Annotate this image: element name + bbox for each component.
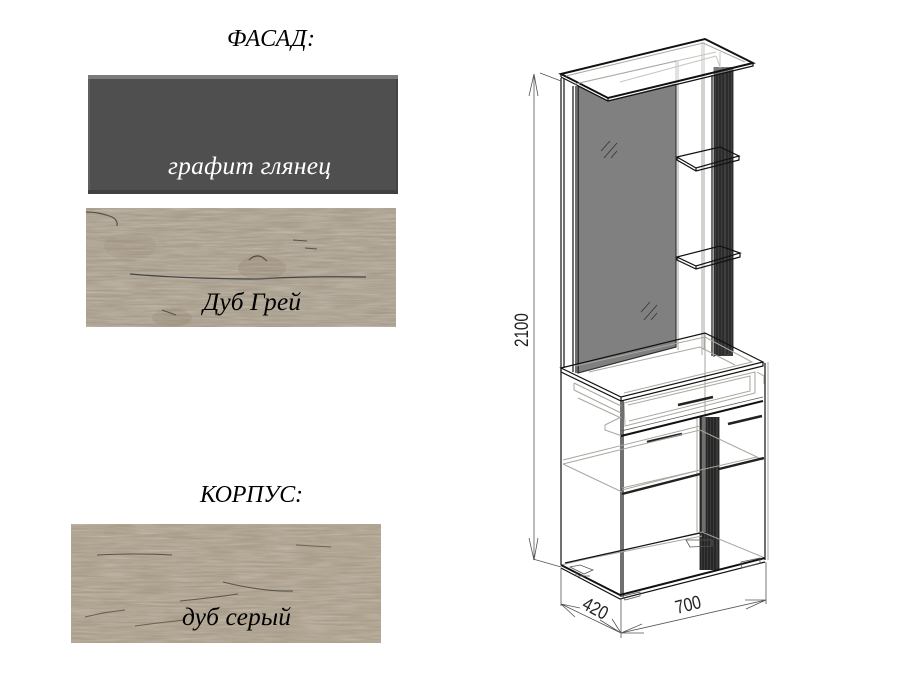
side posts and back lines [561, 75, 765, 597]
dark stripe upper [714, 67, 733, 356]
mirror [578, 84, 676, 373]
shelves [677, 147, 739, 171]
door divider line [621, 401, 763, 436]
heading: фасад: ФАСАД: [227, 26, 315, 52]
mirror glare marks [601, 141, 657, 320]
dark stripe lower [700, 417, 719, 570]
dimension: depth 420 [561, 568, 621, 633]
depth value: 420 [579, 593, 612, 624]
heading: корпус: КОРПУС: [199, 482, 303, 508]
drawer handle [678, 397, 713, 405]
height value: 2100 [510, 313, 532, 347]
panel: graphite gloss swatch [88, 75, 398, 194]
panel: oak grey swatch [86, 208, 396, 327]
top slab [561, 39, 753, 101]
dimension: width 700 [621, 562, 766, 638]
door handles [647, 416, 762, 442]
label: графит глянец: графит глянец [168, 151, 331, 180]
width value: 700 [673, 591, 703, 618]
label: дуб грей: Дуб Грей [201, 287, 301, 316]
drawer [624, 372, 755, 426]
dimension: height 2100 [510, 73, 561, 567]
cabinet top slab [561, 333, 763, 401]
panel: grey oak swatch [71, 524, 381, 643]
base [561, 532, 765, 565]
feet [570, 540, 760, 600]
furniture drawing: hallway unit [561, 39, 768, 600]
interior shelf [563, 426, 763, 492]
door bottom edge [622, 458, 764, 494]
label: дуб серый: дуб серый [182, 602, 291, 631]
